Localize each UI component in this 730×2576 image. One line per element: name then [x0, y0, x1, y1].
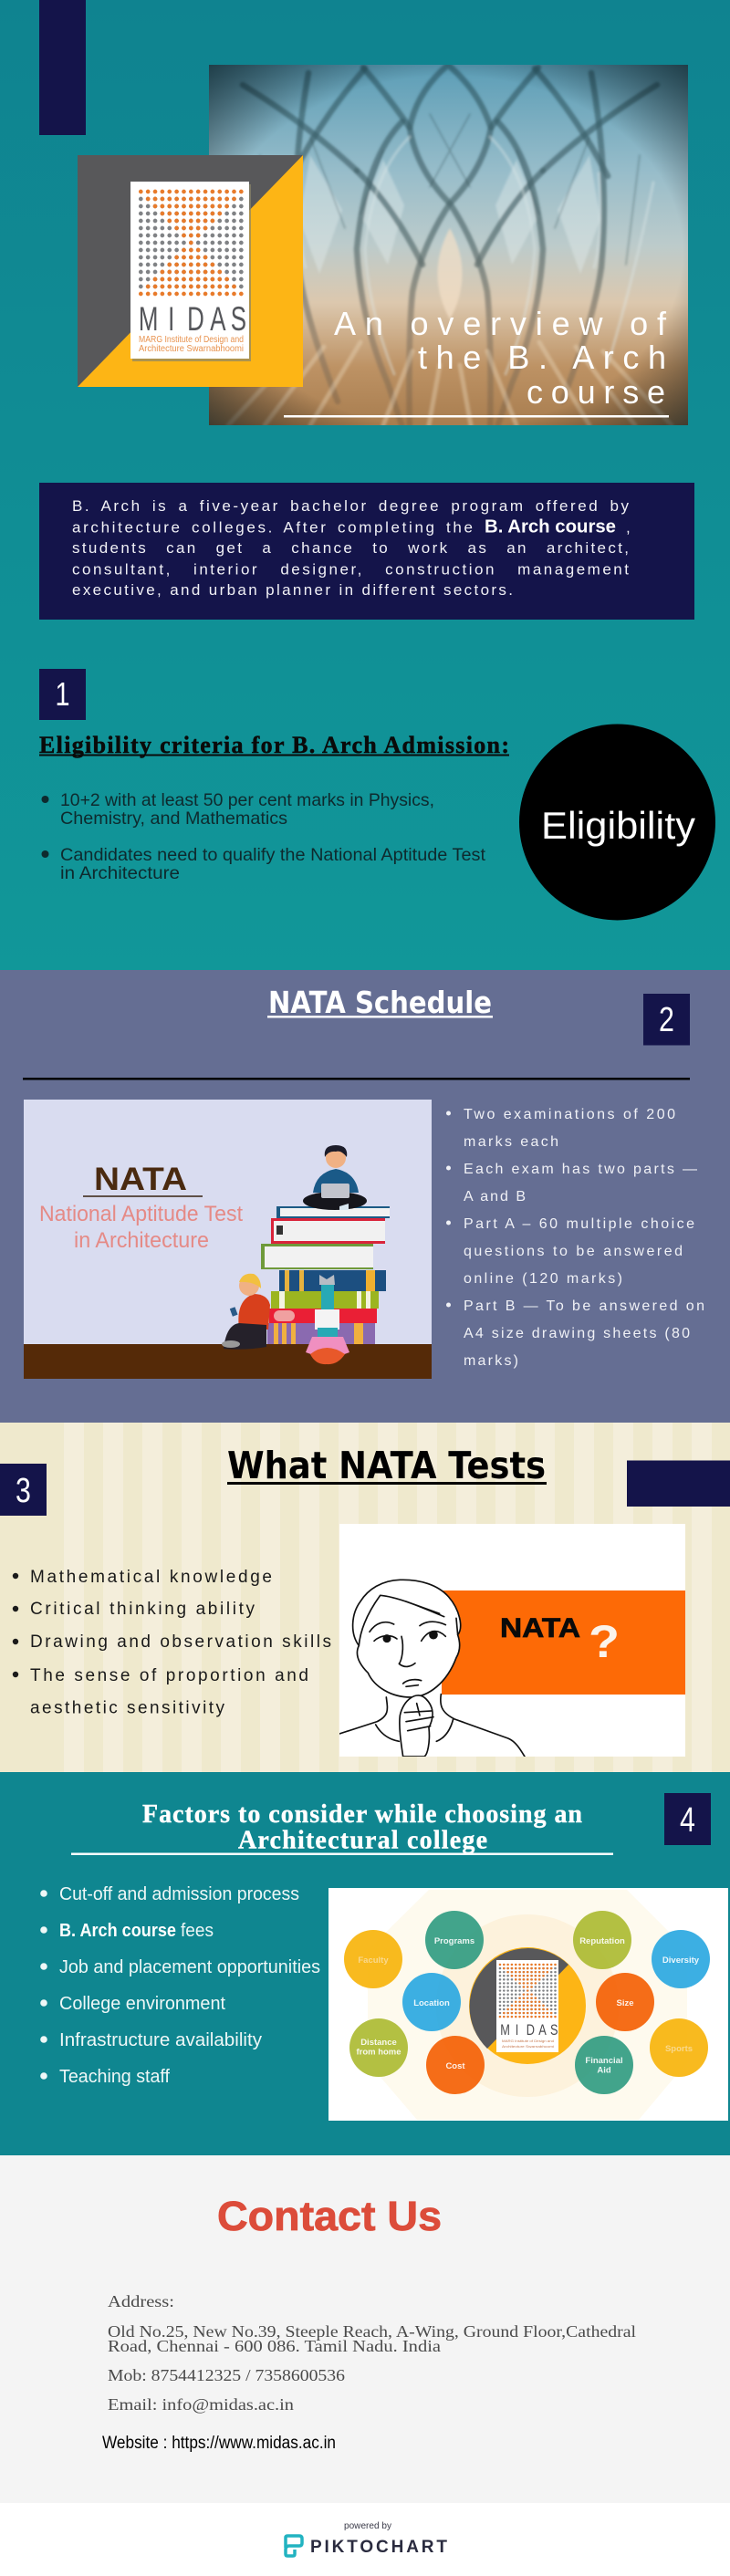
number badge 2: 2: [659, 1001, 674, 1039]
NATA schedule bullets: Part B — To be answered on: [464, 1298, 704, 1314]
contact details: [108, 2292, 636, 2414]
bubble: sports: Sports: [665, 2044, 693, 2054]
NATA schedule bullets: Part A – 60 multiple choice: [464, 1216, 694, 1232]
title: the B. Arch: [418, 339, 666, 376]
heading: what NATA tests: What NATA Tests: [227, 1444, 546, 1487]
factors bullets: Job and placement opportunities: [59, 1957, 320, 1977]
logo block: MIDAS: MARG Institute of Design and: [139, 335, 244, 345]
what NATA tests bullets: Drawing and observation skills: [30, 1632, 331, 1652]
panel background: factors: [0, 1772, 730, 2155]
bubble: financial aid: Aid: [597, 2066, 611, 2075]
boy on top with laptop: [303, 1145, 367, 1210]
heading: eligibility: Eligibility criteria for B. Arch Admission:: [39, 732, 509, 758]
NATA schedule bullets: Each exam has two parts —: [464, 1162, 697, 1177]
pale panels: [299, 155, 600, 319]
illustration: NATA students and books: National Aptitude Test: [39, 1202, 243, 1226]
number badge 3: 3: [16, 1472, 31, 1510]
NATA schedule bullets: Two examinations of 200: [464, 1107, 675, 1122]
diagram: college factors bubbles: MARG Institute of Design and: [502, 2039, 554, 2043]
number badge 4: [664, 1793, 711, 1845]
title: course: [527, 373, 665, 411]
girl lying with legs up: [306, 1275, 349, 1364]
what NATA tests bullets: [13, 1568, 331, 1717]
bubble: size: [596, 1973, 654, 2031]
what NATA tests bullets: The sense of proportion and: [30, 1666, 308, 1685]
NATA schedule bullets: marks each: [464, 1134, 558, 1150]
panel: introduction: [39, 483, 694, 620]
bubble: faculty: Faculty: [358, 1955, 389, 1966]
eligibility bullets: Chemistry, and Mathematics: [60, 808, 287, 829]
NATA schedule bullets: [446, 1107, 704, 1369]
bubble: cost: Cost: [445, 2061, 465, 2071]
panel background: contact: [0, 2155, 730, 2503]
heading: contact us: Contact Us: [217, 2193, 442, 2239]
bubble: distance from home: Distance: [360, 2038, 397, 2048]
number badge 1: 1: [55, 675, 70, 713]
contact details: Road, Chennai - 600 086. Tamil Nadu. India: [108, 2337, 441, 2355]
panel: introduction: students can get a chance to work as an architect,: [72, 539, 629, 557]
number badge 2: [643, 994, 690, 1046]
illustration: thinking person with NATA question: NATA: [500, 1613, 580, 1643]
diagram: college factors bubbles: MIDAS: [500, 2021, 558, 2039]
factors bullets: Infrastructure availability: [59, 2030, 262, 2050]
navy accent bar: [39, 0, 86, 135]
panel: introduction: executive, and urban planner in different sectors.: [72, 581, 513, 599]
bubble: programs: Programs: [434, 1936, 474, 1946]
bubble: size: Size: [616, 1998, 634, 2008]
bubble: diversity: Diversity: [662, 1955, 700, 1966]
NATA schedule bullets: questions to be answered: [464, 1244, 683, 1259]
diagram: college factors bubbles: Architecture Swarnabhoomi: [502, 2044, 554, 2049]
bubble: diversity: [652, 1930, 710, 1988]
bubble: programs: [425, 1911, 484, 1969]
bubble: financial aid: Financial: [585, 2056, 623, 2066]
factors bullets: [40, 1884, 320, 2087]
footer credit: powered by Piktochart: powered by: [344, 2520, 392, 2531]
factors bullets: fees: [181, 1921, 214, 1941]
what NATA tests bullets: aesthetic sensitivity: [30, 1699, 224, 1717]
footer: [0, 2503, 730, 2576]
boy sitting with phone: [222, 1274, 270, 1350]
divider: [23, 1078, 690, 1080]
eligibility circle: Eligibility: [541, 804, 695, 847]
eligibility bullets: [42, 790, 486, 883]
eligibility bullets: Candidates need to qualify the National Aptitude Test: [60, 845, 486, 865]
logo block: MIDAS: Architecture Swarnabhoomi: [139, 344, 244, 354]
bubble: cost: [426, 2036, 485, 2094]
title: An overview of: [334, 305, 667, 342]
navy accent block: [627, 1460, 730, 1507]
contact details: Old No.25, New No.39, Steeple Reach, A-Wing, Ground Floor,Cathedral: [108, 2322, 636, 2341]
footer credit: powered by Piktochart: [286, 2520, 447, 2557]
icon: Piktochart mark: [286, 2536, 302, 2556]
heading: factors: Factors to consider while choosing an: [142, 1800, 582, 1829]
title underline: [284, 415, 669, 418]
number badge 3: [0, 1464, 47, 1516]
NATA schedule bullets: A4 size drawing sheets (80: [464, 1326, 690, 1341]
panel: introduction: consultant, interior designer, construction management: [72, 560, 629, 579]
what NATA tests bullets: Critical thinking ability: [30, 1600, 256, 1619]
heading: NATA schedule: NATA Schedule: [268, 985, 492, 1020]
eligibility bullets: 10+2 with at least 50 per cent marks in Physics,: [60, 790, 434, 810]
illustration: NATA students and books: [24, 1100, 432, 1379]
logo block: MIDAS: [78, 155, 303, 387]
illustration: thinking person with NATA question: [339, 1524, 685, 1757]
footer credit: powered by Piktochart: PIKTOCHART: [310, 2538, 447, 2557]
contact details: Mob: 8754412325 / 7358600536: [108, 2366, 345, 2384]
bubble: distance from home: from home: [356, 2048, 402, 2057]
title: [334, 305, 667, 411]
eligibility bullets: in Architecture: [60, 863, 180, 883]
illustration: thinking person with NATA question: ?: [589, 1616, 620, 1667]
eligibility circle: [519, 725, 715, 920]
NATA schedule bullets: online (120 marks): [464, 1271, 622, 1287]
what NATA tests bullets: Mathematical knowledge: [30, 1568, 272, 1587]
illustration: NATA students and books: in Architecture: [74, 1228, 209, 1253]
bubble: faculty: [344, 1930, 402, 1988]
panel: introduction: B. Arch is a five-year bachelor degree program offered by: [72, 497, 630, 515]
hero photo: architecture lattice: [209, 65, 688, 438]
bubble: reputation: [573, 1911, 631, 1969]
number badge 1: [39, 669, 86, 720]
section background: intro and eligibility: [0, 0, 730, 970]
NATA schedule bullets: marks): [464, 1353, 518, 1369]
factors bullets: Cut-off and admission process: [59, 1884, 299, 1904]
contact details: Email: info@midas.ac.in: [108, 2395, 294, 2414]
illustration: NATA students and books: NATA: [94, 1162, 187, 1197]
diagram: college factors bubbles: [328, 1888, 728, 2121]
bubble: sports: [650, 2018, 708, 2077]
contact details: Address:: [108, 2292, 174, 2310]
panel background: what NATA tests: [0, 1423, 730, 1772]
bubble: location: Location: [413, 1998, 450, 2008]
logo block: MIDAS: MIDAS: [139, 299, 246, 338]
factors bullets: B. Arch course: [59, 1921, 176, 1941]
bubble: financial aid: [575, 2036, 633, 2094]
bubble: location: [402, 1973, 461, 2031]
panel: introduction: ,: [626, 518, 631, 537]
heading: factors: [71, 1800, 613, 1855]
panel: introduction: architecture colleges. After completing the: [72, 518, 473, 537]
bubble: distance from home: [349, 2018, 408, 2077]
heading: factors: Architectural college: [238, 1827, 487, 1854]
website: Website : https://www.midas.ac.in: [102, 2434, 336, 2453]
NATA schedule bullets: A and B: [464, 1189, 526, 1205]
panel: introduction: B. Arch course: [485, 516, 616, 537]
number badge 4: 4: [680, 1801, 695, 1840]
panel background: NATA schedule: [0, 970, 730, 1423]
bubble: reputation: Reputation: [579, 1936, 625, 1946]
books stack: [261, 1206, 390, 1344]
factors bullets: College environment: [59, 1994, 225, 2014]
factors bullets: Teaching staff: [59, 2067, 170, 2087]
